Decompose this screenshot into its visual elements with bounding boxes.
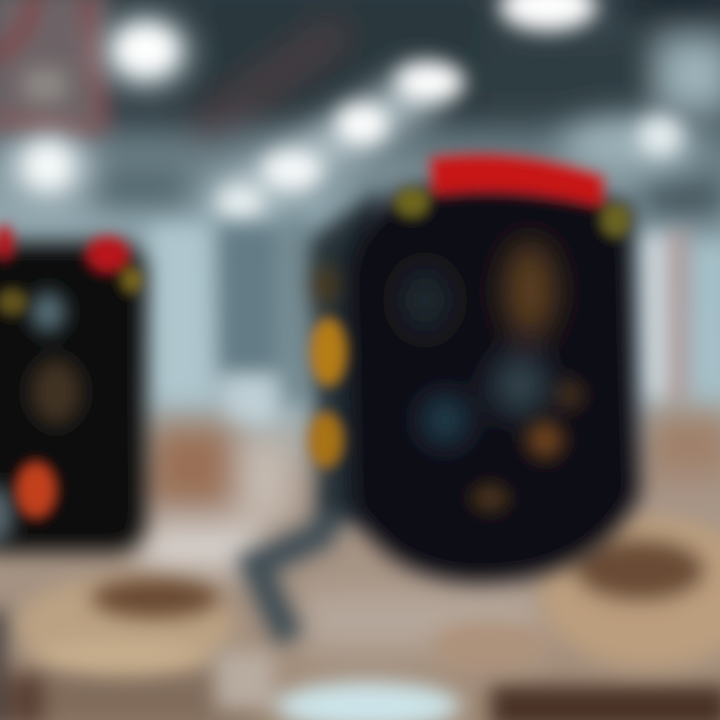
pale floor glow (0, 610, 460, 720)
floor: tan rings and pale surfaces (0, 410, 720, 720)
tan ring left (17, 577, 233, 673)
tyre side (308, 185, 380, 530)
left tyre body (0, 242, 146, 552)
panel: top-left sign (0, 0, 108, 136)
tyre body (347, 183, 640, 582)
left tyre detail (0, 292, 82, 545)
small left tyre (0, 224, 146, 552)
red tyre band (430, 154, 604, 208)
tan ring right (430, 516, 720, 720)
tyre warm marks (313, 265, 582, 510)
columns (150, 215, 720, 425)
ceiling (0, 0, 720, 220)
tyre inner detail (399, 240, 556, 444)
ceiling light glow (12, 16, 700, 205)
tan ring left hollow (30, 578, 219, 667)
large tyre (307, 154, 640, 582)
ceiling lights (26, 0, 682, 219)
yellow tyre marks (307, 186, 632, 468)
tool in foreground (255, 490, 345, 640)
left tyre red and yellow marks (0, 224, 143, 518)
